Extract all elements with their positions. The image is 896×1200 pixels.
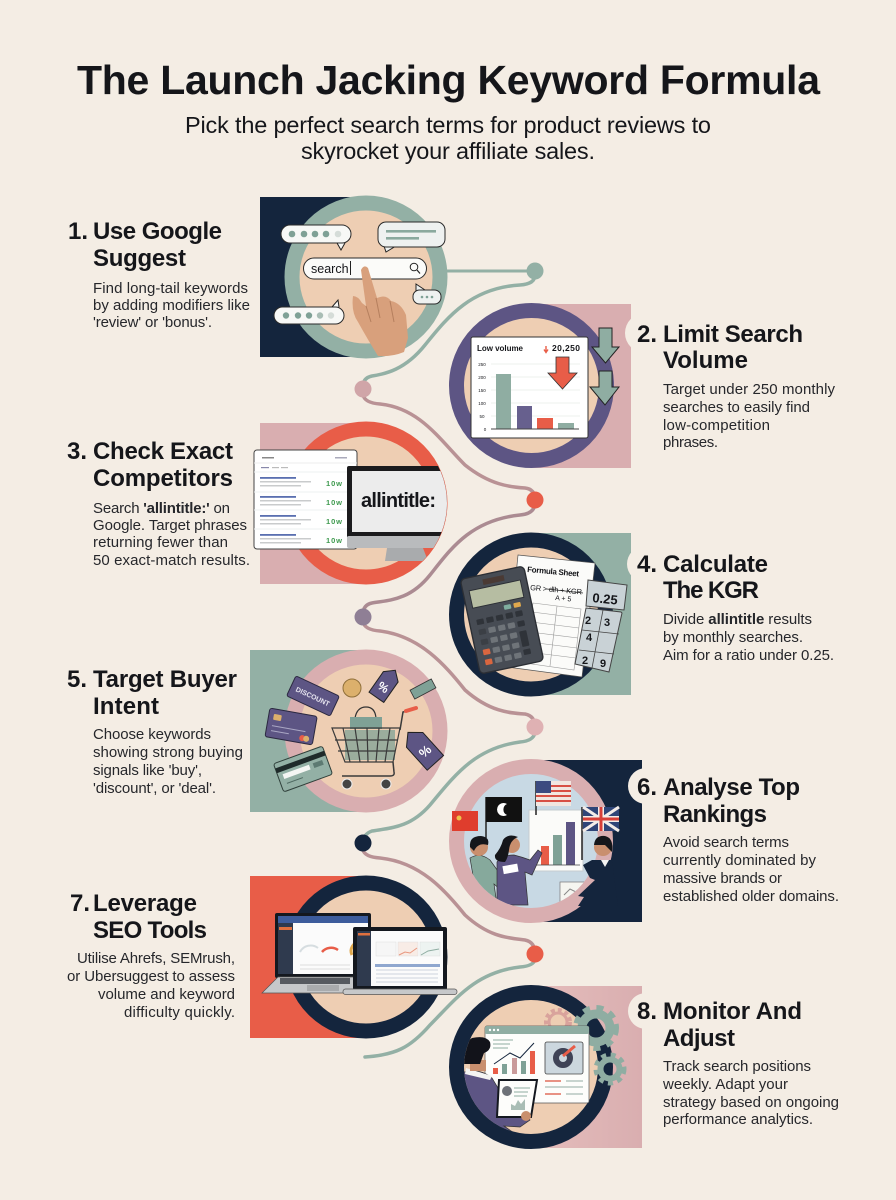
connector nodes	[354, 262, 544, 962]
text: step 6: currently dominated by	[663, 852, 816, 869]
icon: percent tag lower	[400, 725, 444, 770]
icon: discount card: DISCOUNT	[294, 686, 331, 709]
heading: step 8: Adjust	[663, 1025, 735, 1052]
text: step 7: volume and keyword	[98, 986, 235, 1003]
heading: step 2: Limit Search	[663, 321, 803, 348]
heading: step 7	[70, 890, 207, 944]
text: step 2	[663, 381, 836, 451]
panel: step 7 illustration	[250, 876, 457, 1038]
text: step 6: massive brands or	[663, 870, 782, 887]
text: step 3: returning fewer than	[93, 534, 228, 551]
heading: step 5: Intent	[93, 693, 159, 720]
panel: step 2 illustration	[456, 304, 665, 468]
result and keypad cards: 0.25	[592, 590, 618, 608]
search results card: 10w	[326, 536, 342, 545]
title: The Launch Jacking Keyword Formula	[77, 57, 821, 103]
text: step 7: Utilise Ahrefs, SEMrush,	[77, 950, 235, 967]
result and keypad cards: 2	[582, 655, 588, 667]
text: step 2: phrases.	[663, 434, 718, 451]
bar chart card: 100	[478, 401, 486, 406]
formula sheet	[507, 555, 595, 677]
icon: shopping cart	[332, 707, 416, 789]
result and keypad cards: 4	[586, 632, 593, 644]
subtitle: skyrocket your affiliate sales.	[301, 138, 595, 164]
icon: chat bubble dots top	[281, 225, 351, 250]
subtitle	[185, 112, 711, 164]
browser window dashboard	[485, 1026, 589, 1103]
heading: step 1: 1.	[68, 218, 88, 245]
text: step 1: by adding modifiers like	[93, 297, 250, 314]
text: step 8: weekly. Adapt your	[662, 1076, 788, 1093]
bar chart card: 20,250	[552, 343, 580, 353]
heading: step 2: Volume	[663, 347, 748, 374]
icon: discount card	[287, 676, 339, 716]
text: step 1: 'review' or 'bonus'.	[93, 314, 212, 331]
text: step 6: established older domains.	[663, 888, 839, 905]
heading: step 1: Use Google	[93, 218, 222, 245]
icon: credit card purple	[265, 708, 317, 745]
text: step 4: Divide allintitle results	[663, 611, 812, 628]
search results card: 10w	[326, 517, 342, 526]
text: step 3: Search 'allintitle:' on	[93, 500, 230, 517]
heading: step 1: Suggest	[93, 245, 186, 272]
heading: step 5: Target Buyer	[93, 666, 237, 693]
search results card	[254, 450, 357, 549]
heading: step 3: Competitors	[93, 465, 233, 492]
result and keypad cards	[575, 580, 627, 672]
text: step 4: by monthly searches.	[663, 629, 803, 646]
heading: step 7: SEO Tools	[93, 917, 207, 944]
laptop front	[343, 927, 457, 994]
bar chart card: 150	[478, 388, 486, 393]
heading: step 4: 4.	[637, 551, 657, 578]
heading: step 4: The KGR	[663, 577, 759, 604]
people presenting	[470, 836, 587, 905]
icon: red down arrow	[548, 357, 577, 389]
heading: step 3: Check Exact	[93, 438, 233, 465]
laptop back	[262, 913, 373, 993]
icon: percent tag top: %	[375, 679, 392, 696]
heading: step 8	[637, 998, 802, 1052]
formula sheet: GR > dlh + KGR	[530, 583, 583, 597]
text: step 8: performance analytics.	[663, 1111, 813, 1128]
icon: gears	[546, 1008, 624, 1083]
bar chart card: Low volume	[477, 344, 524, 353]
text: step 2: low-competition	[663, 417, 770, 434]
heading: step 2	[637, 321, 803, 374]
panel: step 6 illustration	[452, 760, 664, 922]
text: step 4: Aim for a ratio under 0.25.	[663, 647, 834, 664]
icon: pointing hand	[353, 266, 408, 356]
text: step 3: Google. Target phrases	[93, 517, 247, 534]
text: step 8: strategy based on ongoing	[663, 1094, 839, 1111]
heading: step 8: Monitor And	[663, 998, 802, 1025]
subtitle: Pick the perfect search terms for product reviews to	[185, 112, 711, 138]
heading: step 1	[68, 218, 222, 272]
presenter in navy suit	[578, 836, 618, 906]
panel: step 4 illustration	[456, 533, 663, 695]
bar chart card	[471, 337, 588, 438]
search results card: 10w	[326, 479, 342, 488]
icon: chat bubble dots bottom	[274, 300, 344, 324]
bar chart card: 50	[479, 414, 485, 419]
bar chart card: 0	[484, 427, 487, 432]
heading: step 5: 5.	[67, 666, 87, 693]
bar chart card: 250	[478, 362, 486, 367]
text: step 6: Avoid search terms	[663, 834, 789, 851]
bar chart card: 200	[478, 375, 486, 380]
icon: credit card green	[273, 746, 333, 792]
heading: step 4	[637, 551, 768, 604]
heading: step 6: Rankings	[663, 801, 767, 828]
icon: chat bubble lines	[378, 222, 445, 252]
connector path between steps	[363, 271, 535, 1057]
icon: coin	[343, 679, 361, 697]
icon: tablet	[497, 1080, 537, 1121]
heading: step 2: 2.	[637, 321, 657, 348]
text: step 8	[662, 1058, 839, 1128]
formula sheet: A + 5	[555, 595, 572, 603]
formula sheet: Formula Sheet	[527, 565, 580, 579]
text: step 5	[93, 726, 243, 797]
icon: green ticket	[410, 679, 436, 699]
text: step 4	[663, 611, 834, 664]
result and keypad cards: 2	[585, 615, 591, 627]
heading: step 6: 6.	[637, 774, 657, 801]
panel: step 8 illustration	[456, 986, 664, 1148]
icon: green down arrows	[590, 328, 619, 405]
chart board	[529, 810, 583, 871]
icon: calculator	[460, 566, 544, 674]
heading: step 3: 3.	[67, 438, 87, 465]
text: step 5: Choose keywords	[93, 726, 211, 743]
text: step 3: 50 exact-match results.	[93, 552, 250, 569]
panel: step 3 illustration	[254, 423, 452, 584]
heading: step 7: Leverage	[93, 890, 197, 917]
heading: step 5	[67, 666, 237, 720]
heading: step 7: 7.	[70, 890, 90, 917]
monitor with allintitle: allintitle:	[361, 490, 436, 512]
text: step 5: showing strong buying	[93, 744, 243, 761]
monitor with allintitle	[347, 466, 452, 561]
search bar: search	[311, 262, 349, 276]
text: step 2: searches to easily find	[663, 399, 810, 416]
icon: percent tag lower: %	[416, 742, 435, 761]
text: step 6	[663, 834, 839, 905]
text: step 5: signals like 'buy',	[93, 762, 202, 779]
search bar	[304, 258, 426, 279]
person with tablet	[463, 1037, 530, 1135]
heading: step 6	[637, 774, 800, 828]
panel: step 5 illustration	[250, 650, 444, 812]
result and keypad cards: 9	[600, 658, 606, 670]
text: step 7: difficulty quickly.	[124, 1004, 235, 1021]
heading: step 4: Calculate	[663, 551, 768, 578]
heading: step 6: Analyse Top	[663, 774, 800, 801]
panel: step 1 illustration	[260, 197, 445, 357]
text: step 2: Target under 250 monthly	[663, 381, 836, 398]
icon: percent tag top	[369, 665, 403, 702]
text: step 1	[93, 280, 250, 331]
search results card: 10w	[326, 498, 342, 507]
icon: flags	[452, 781, 619, 860]
text: step 7	[67, 950, 235, 1021]
result and keypad cards: 3	[604, 617, 610, 629]
text: step 5: 'discount', or 'deal'.	[93, 780, 216, 797]
text: step 3	[93, 500, 250, 569]
text: step 8: Track search positions	[663, 1058, 811, 1075]
heading: step 8: 8.	[637, 998, 657, 1025]
heading: step 3	[67, 438, 233, 492]
icon: small chat bubble	[413, 284, 441, 304]
text: step 1: Find long-tail keywords	[93, 280, 248, 297]
text: step 7: or Ubersuggest to assess	[67, 968, 235, 985]
